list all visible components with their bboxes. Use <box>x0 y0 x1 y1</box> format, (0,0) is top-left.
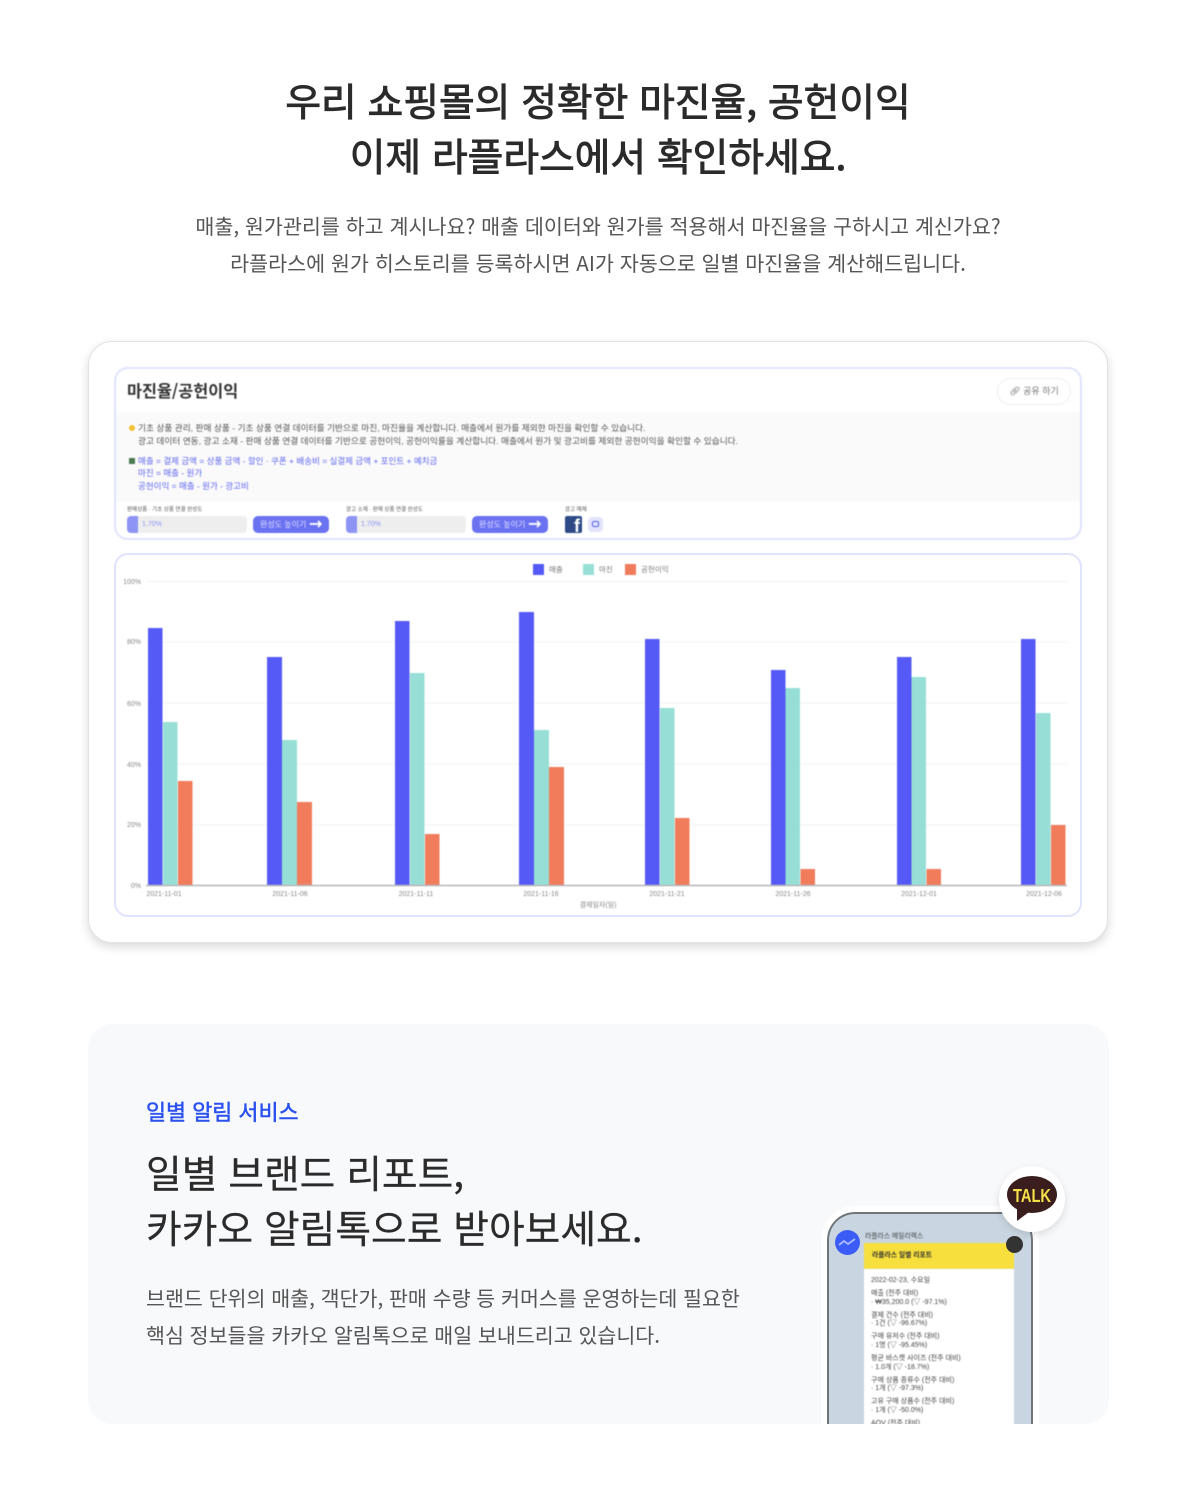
formula text: 매출 = 결제 금액 = 상품 금액 - 할인 · 쿠폰 + 배송비 = 실결제 금액 + 포인트 + 예치금 <box>138 456 437 466</box>
panel: margin info box <box>114 367 1082 540</box>
y axis labels: 60% <box>127 701 141 708</box>
section heading: 일별 브랜드 리포트, <box>146 1144 464 1200</box>
message body: 평균 바스켓 사이즈 (전주 대비) <box>871 1355 961 1362</box>
message body: 2022-02-23, 수요일 <box>871 1277 930 1284</box>
title <box>285 72 911 183</box>
progress bar 1 <box>127 516 247 533</box>
progress bar 2 <box>346 516 466 533</box>
message body: · 1건 (▽ -96.67%) <box>871 1320 927 1327</box>
button 1: 완성도 높이기 <box>260 520 306 529</box>
completeness label 2: 광고 소재 · 판매 상품 연결 완성도 <box>346 507 423 513</box>
message body: 구매 상품 종류수 (전주 대비) <box>871 1377 954 1384</box>
description text <box>128 423 738 446</box>
icon: facebook <box>565 516 582 533</box>
panel: dashboard card <box>88 341 1108 943</box>
section text: 브랜드 단위의 매출, 객단가, 판매 수량 등 커머스를 운영하는데 필요한 <box>146 1282 740 1312</box>
section heading <box>146 1144 643 1255</box>
legend: 마진 <box>599 564 613 574</box>
subtitle text: 라플라스에 원가 히스토리를 등록하시면 AI가 자동으로 일별 마진율을 계산해드립니다. <box>230 247 966 277</box>
y axis labels: 100% <box>123 579 141 586</box>
icon: brand avatar <box>835 1230 860 1255</box>
subtitle text <box>195 210 1001 277</box>
message body: 결제 건수 (전주 대비) <box>871 1312 933 1319</box>
formula text: 공헌이익 = 매출 - 원가 - 광고비 <box>138 480 249 490</box>
button 2 <box>472 516 548 533</box>
description text: 기초 상품 관리, 판매 상품 - 기초 상품 연결 데이터를 기반으로 마진, 마진율을 계산합니다. 매출에서 원가를 제외한 마진을 확인할 수 있습니다. <box>138 423 645 433</box>
message body: 고유 구매 상품수 (전주 대비) <box>871 1398 954 1405</box>
x axis labels: 2021-11-06 <box>272 891 308 898</box>
progress bar 1: 1.70% <box>142 521 162 528</box>
section heading: 카카오 알림톡으로 받아보세요. <box>146 1199 643 1255</box>
x axis labels: 2021-12-01 <box>901 891 937 898</box>
message body <box>864 1269 1014 1459</box>
button 2: 완성도 높이기 <box>479 520 525 529</box>
y axis labels: 20% <box>127 822 141 829</box>
x axis labels: 2021-11-16 <box>523 891 559 898</box>
button 1 <box>253 516 329 533</box>
message body: · 1.0개 (▽ -18.7%) <box>871 1364 929 1371</box>
x axis labels: 2021-11-11 <box>399 891 433 898</box>
panel heading: 마진율/공헌이익 <box>127 378 238 402</box>
formula text <box>128 456 438 491</box>
section label: 일별 알림 서비스 <box>146 1096 299 1126</box>
x axis title: 결제일자(일) <box>580 900 616 909</box>
message body: · 1명 (▽ -95.45%) <box>871 1342 927 1349</box>
message body: · 1개 (▽ -97.3%) <box>871 1385 923 1392</box>
formula text: 마진 = 매출 - 원가 <box>138 468 202 478</box>
info background <box>116 412 1080 502</box>
sender name: 라플라스 메일리렉스 <box>865 1232 923 1240</box>
panel: daily notification <box>88 1024 1109 1424</box>
icon: media channel <box>588 517 603 532</box>
y axis labels: 80% <box>127 639 141 646</box>
message body: · 1개 (▽ -50.0%) <box>871 1407 923 1414</box>
subtitle text: 매출, 원가관리를 하고 계시나요? 매출 데이터와 원가를 적용해서 마진율을 구하시고 계신가요? <box>195 210 1001 240</box>
small dark badge <box>1006 1236 1022 1253</box>
share button: 🔗︎ 공유 하기 <box>1009 386 1059 396</box>
title: 우리 쇼핑몰의 정확한 마진율, 공헌이익 <box>285 72 911 128</box>
legend: 공헌이익 <box>641 564 669 574</box>
x axis labels: 2021-11-26 <box>775 891 811 898</box>
title: 이제 라플라스에서 확인하세요. <box>350 127 846 183</box>
progress bar 2: 1.70% <box>361 521 381 528</box>
share button <box>997 378 1071 405</box>
message header <box>864 1243 1014 1269</box>
bars: margin <box>163 673 1050 885</box>
button 1: → <box>309 514 322 533</box>
x axis labels <box>146 891 1062 898</box>
x axis labels: 2021-12-06 <box>1026 891 1062 898</box>
x axis labels: 2021-11-01 <box>146 891 182 898</box>
button 2: → <box>528 514 541 533</box>
panel: chart box <box>114 553 1082 917</box>
icon: kakao talk badge: TALK <box>1013 1186 1051 1206</box>
bar chart <box>123 563 1068 909</box>
y axis labels <box>123 579 141 890</box>
icon: kakao talk badge <box>999 1166 1065 1232</box>
x axis labels: 2021-11-21 <box>649 891 685 898</box>
section text <box>146 1282 740 1349</box>
section text: 핵심 정보들을 카카오 알림톡으로 매일 보내드리고 있습니다. <box>146 1319 660 1349</box>
message body: · ₩35,200.0 (▽ -97.1%) <box>871 1298 947 1306</box>
bars: contribution profit <box>178 767 1066 885</box>
bars: revenue <box>148 612 1036 885</box>
y axis labels: 40% <box>127 762 141 769</box>
completeness label 1: 판매상품 · 기초 상품 연결 완성도 <box>127 507 202 513</box>
y axis labels: 0% <box>131 883 141 890</box>
description text: 광고 데이터 연동, 광고 소재 - 판매 상품 연결 데이터를 기반으로 공헌이익, 공헌이익률을 계산합니다. 매출에서 원가 및 광고비를 제외한 공헌이익을 확인할 수 있습니다. <box>138 436 738 446</box>
ad channel label: 광고 매체 <box>565 507 587 513</box>
legend <box>533 564 669 575</box>
message body: 구매 유저수 (전주 대비) <box>871 1333 939 1340</box>
message header: 라플라스 일별 리포트 <box>872 1252 932 1259</box>
phone mockup <box>827 1212 1033 1442</box>
legend: 매출 <box>549 564 563 574</box>
message body: 매출 (전주 대비) <box>871 1290 918 1297</box>
